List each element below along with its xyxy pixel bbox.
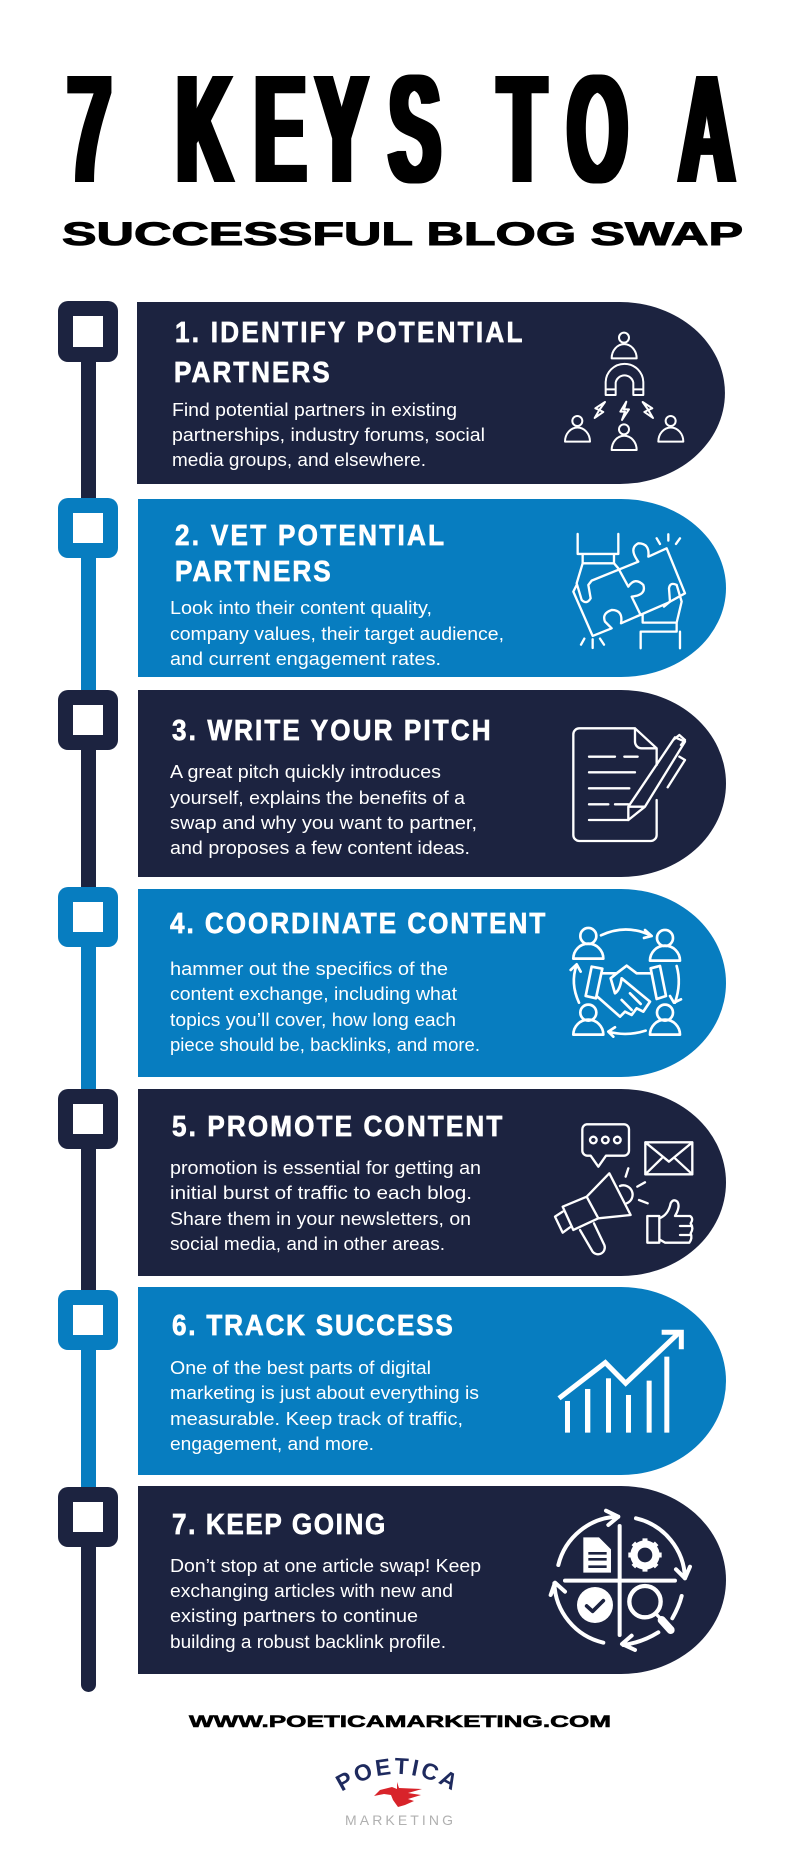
body text 1: partnerships, industry forums, social bbox=[172, 424, 485, 445]
heading 2: PARTNERS bbox=[175, 555, 331, 587]
body text 6: measurable. Keep track of traffic, bbox=[170, 1408, 463, 1429]
timeline stem 2 bbox=[81, 550, 96, 700]
logo: Poetica Marketing: MARKETING bbox=[345, 1812, 453, 1828]
icon: magnet attracting people bbox=[565, 333, 683, 450]
timeline stem 1 bbox=[81, 355, 96, 505]
panel: step 7 bbox=[58, 1486, 726, 1674]
icon: rising bar chart with arrow bbox=[559, 1332, 681, 1433]
body text 7: exchanging articles with new and bbox=[170, 1580, 453, 1601]
logo: Poetica Marketing: POETICA bbox=[335, 1758, 454, 1791]
logo: Poetica Marketing bbox=[335, 1758, 454, 1828]
timeline stem 5 bbox=[81, 1145, 96, 1295]
body text 6: One of the best parts of digital bbox=[170, 1357, 431, 1378]
body text 2 bbox=[170, 597, 504, 669]
marker 2 bbox=[58, 498, 118, 558]
timeline stem 4 bbox=[81, 940, 96, 1095]
body text 4: hammer out the specifics of the bbox=[170, 958, 448, 979]
body text 7 bbox=[170, 1555, 481, 1652]
panel: step 2 bbox=[58, 498, 726, 677]
body text 5: promotion is essential for getting an bbox=[170, 1157, 481, 1178]
body text 1: Find potential partners in existing bbox=[172, 399, 457, 420]
website URL: WWW.POETICAMARKETING.COM bbox=[189, 1712, 611, 1731]
heading 1 bbox=[174, 316, 522, 388]
heading 2: 2. VET POTENTIAL bbox=[175, 519, 444, 551]
panel: step 6 bbox=[58, 1287, 726, 1475]
marker 6 bbox=[58, 1290, 118, 1350]
panel: step 3 bbox=[58, 690, 726, 877]
body text 4 bbox=[170, 958, 480, 1055]
body text 7: Don’t stop at one article swap! Keep bbox=[170, 1555, 481, 1576]
icon: process cycle with document, gear, check and magnifier bbox=[551, 1511, 690, 1650]
timeline stem 7 bbox=[81, 1540, 96, 1692]
body text 3: A great pitch quickly introduces bbox=[170, 761, 441, 782]
marker 1 bbox=[58, 301, 118, 362]
body text 5: social media, and in other areas. bbox=[170, 1233, 445, 1254]
heading 4: 4. COORDINATE CONTENT bbox=[170, 907, 545, 939]
body text 5: initial burst of traffic to each blog. bbox=[170, 1182, 472, 1203]
body text 7: existing partners to continue bbox=[170, 1605, 418, 1626]
body text 3: swap and why you want to partner, bbox=[170, 812, 477, 833]
marker 5 bbox=[58, 1089, 118, 1149]
body text 4: topics you’ll cover, how long each bbox=[170, 1009, 456, 1030]
body text 6: marketing is just about everything is bbox=[170, 1382, 479, 1403]
panel: step 5 bbox=[58, 1089, 726, 1276]
icon: megaphone, chat bubble, envelope, thumbs up bbox=[555, 1124, 692, 1254]
body text 3: yourself, explains the benefits of a bbox=[170, 787, 466, 808]
body text 5 bbox=[170, 1157, 481, 1254]
body text 2: Look into their content quality, bbox=[170, 597, 432, 618]
heading 6: 6. TRACK SUCCESS bbox=[172, 1309, 453, 1341]
body text 3: and proposes a few content ideas. bbox=[170, 837, 470, 858]
timeline stem 6 bbox=[81, 1345, 96, 1495]
body text 7: building a robust backlink profile. bbox=[170, 1631, 446, 1652]
body text 4: content exchange, including what bbox=[170, 983, 457, 1004]
body text 3 bbox=[170, 761, 477, 858]
body text 2: company values, their target audience, bbox=[170, 623, 504, 644]
body text 6 bbox=[170, 1357, 479, 1454]
body text 1 bbox=[172, 399, 485, 470]
body text 6: engagement, and more. bbox=[170, 1433, 374, 1454]
heading 1: 1. IDENTIFY POTENTIAL bbox=[175, 316, 522, 348]
icon: hands joining puzzle pieces bbox=[573, 534, 685, 648]
panel: step 4 bbox=[58, 887, 726, 1077]
body text 5: Share them in your newsletters, on bbox=[170, 1208, 471, 1229]
marker 4 bbox=[58, 887, 118, 947]
marker 3 bbox=[58, 690, 118, 750]
body text 4: piece should be, backlinks, and more. bbox=[170, 1034, 480, 1055]
icon: handshake with rotating people bbox=[571, 928, 681, 1037]
title: 7KEYSTOA bbox=[68, 43, 735, 215]
body text 2: and current engagement rates. bbox=[170, 648, 441, 669]
heading 2 bbox=[175, 519, 444, 587]
body text 1: media groups, and elsewhere. bbox=[172, 449, 426, 470]
icon: document and pen bbox=[573, 728, 685, 841]
marker 7 bbox=[58, 1487, 118, 1547]
subtitle: SUCCESSFUL BLOG SWAP bbox=[62, 216, 743, 252]
timeline stem 3 bbox=[81, 745, 96, 895]
heading 5: 5. PROMOTE CONTENT bbox=[172, 1110, 502, 1142]
panel: step 1 bbox=[58, 301, 725, 484]
heading 7: 7. KEEP GOING bbox=[172, 1508, 385, 1540]
heading 1: PARTNERS bbox=[174, 356, 330, 388]
heading 3: 3. WRITE YOUR PITCH bbox=[172, 714, 491, 746]
